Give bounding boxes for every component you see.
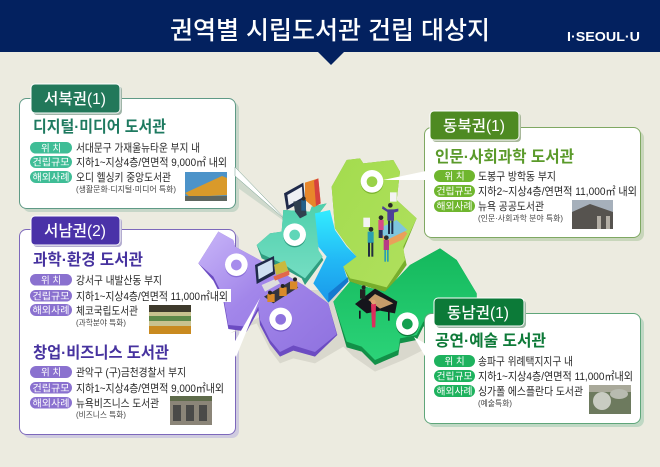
info rows: science library <box>30 274 231 328</box>
location ring: southeast <box>396 312 419 336</box>
info rows: northwest <box>30 142 227 194</box>
region: Han river cyan <box>313 210 357 303</box>
info rows: northeast: (인문·사회과학 분야 특화) <box>478 213 563 223</box>
title: 권역별 시립도서관 건립 대상지 <box>170 17 490 45</box>
info rows: southeast: 위 치 <box>444 356 465 368</box>
info rows: science library: 지하1~지상4층/연면적 11,000㎡내외 <box>76 289 228 303</box>
info rows: northeast: 뉴욕 공공도서관 <box>478 200 544 213</box>
info rows: southeast <box>434 355 633 408</box>
info rows: southeast: (예술특화) <box>478 398 512 408</box>
info rows: business library: 건립규모 <box>32 382 70 394</box>
location ring: northeast <box>361 170 383 194</box>
heading: performing arts library: 공연·예술 도서관 <box>435 332 546 350</box>
leader wedge: northeast <box>383 171 426 180</box>
info rows: northwest: 지하1~지상4층/연면적 9,000㎡ 내외 <box>76 155 227 169</box>
info rows: southeast: 송파구 위례택지지구 내 <box>478 355 573 368</box>
region: northwest teal <box>257 203 327 285</box>
info rows: business library: 해외사례 <box>32 397 70 409</box>
location ring: northwest <box>283 223 306 247</box>
illustration: people reading on books <box>363 192 407 262</box>
leader wedge shadow: northwest <box>238 172 291 226</box>
map shadow <box>230 290 423 372</box>
info rows: southeast: 지하1~지상4층/연면적 11,000㎡내외 <box>478 369 633 383</box>
region: southwest purple <box>198 232 337 357</box>
heading: science environment library: 과학·환경 도서관 <box>33 251 143 269</box>
heading: humanities library: 인문·사회과학 도서관 <box>435 148 574 166</box>
map of Seoul regions <box>198 158 477 372</box>
panel: southeast <box>414 298 644 427</box>
location ring: southwest 2 <box>269 308 292 332</box>
info rows: science library: 강서구 내발산동 부지 <box>76 274 162 287</box>
info rows: northwest: 해외사례 <box>32 172 70 184</box>
info rows: southeast: 싱가폴 에스플란다 도서관 <box>478 385 583 398</box>
photo: Oodi Helsinki library <box>185 172 227 201</box>
info rows: science library: 체코국립도서관 <box>76 304 138 318</box>
info rows: northeast: 건립규모 <box>436 186 473 198</box>
tab: southeast <box>434 298 526 328</box>
leader wedge: southeast <box>414 337 426 358</box>
illustration: monitor and books <box>284 178 321 218</box>
info rows: science library: 건립규모 <box>32 290 70 302</box>
tab: southwest <box>31 216 122 247</box>
photo: New York business library <box>170 396 212 425</box>
info rows: northwest: (생활문화·디지털·미디어 특화) <box>76 184 176 194</box>
illustration: piano and singer <box>355 285 397 327</box>
info rows: business library: (비즈니스 특화) <box>76 410 126 420</box>
tab: northeast <box>430 111 521 142</box>
info rows: science library: 위 치 <box>41 274 61 286</box>
leader wedge: northwest <box>235 167 289 223</box>
photo: New York public library <box>572 200 613 229</box>
tab: northwest <box>31 84 122 115</box>
info rows: northwest: 오디 헬싱키 중앙도서관 <box>76 171 171 184</box>
region: southeast green <box>333 248 477 365</box>
header band <box>0 0 660 65</box>
info rows: southeast: 건립규모 <box>436 370 473 382</box>
info rows: northeast <box>434 170 637 223</box>
tab: southwest: 서남권(2) <box>44 222 106 240</box>
info rows: business library <box>30 365 224 420</box>
info rows: business library: 관악구 (구)금천경찰서 부지 <box>76 365 186 379</box>
heading: digital media library: 디지털·미디어 도서관 <box>33 118 166 136</box>
info rows: business library: 위 치 <box>41 366 61 378</box>
tab: southeast: 동남권(1) <box>447 304 509 322</box>
info rows: business library: 지하1~지상4층/연면적 9,000㎡내외 <box>76 381 224 395</box>
heading: startup business library: 창업·비즈니스 도서관 <box>33 344 169 362</box>
panel: northwest <box>20 84 291 226</box>
info rows: northeast: 위 치 <box>444 170 465 182</box>
region: northeast lime <box>332 158 417 293</box>
info rows: northeast: 도봉구 방학동 부지 <box>478 170 556 183</box>
photo: Czech national library <box>149 305 191 334</box>
panel: southwest <box>20 230 239 438</box>
info rows: southeast: 해외사례 <box>436 386 472 398</box>
leader wedge: southwest <box>231 298 260 357</box>
info rows: northwest: 건립규모 <box>32 156 70 168</box>
tab: northwest: 서북권(1) <box>44 90 106 108</box>
info rows: northeast: 해외사례 <box>436 200 472 212</box>
logo: I SEOUL U: I·SEOUL·U <box>567 30 640 44</box>
photo: Singapore Esplanade library <box>589 385 631 414</box>
info rows: science library: (과학분야 특화) <box>76 318 126 328</box>
illustration: computer class <box>255 256 298 303</box>
info rows: northwest: 위 치 <box>41 142 61 154</box>
info rows: business library: 뉴욕비즈니스 도서관 <box>76 397 159 410</box>
info rows: science library: 해외사례 <box>32 304 70 316</box>
panel: northeast <box>383 111 644 241</box>
tab: northeast: 동북권(1) <box>443 117 505 135</box>
info rows: northeast: 지하2~지상4층/연면적 11,000㎡ 내외 <box>478 184 637 198</box>
location ring: southwest 1 <box>225 253 248 277</box>
info rows: northwest: 서대문구 가재울뉴타운 부지 내 <box>76 142 200 154</box>
